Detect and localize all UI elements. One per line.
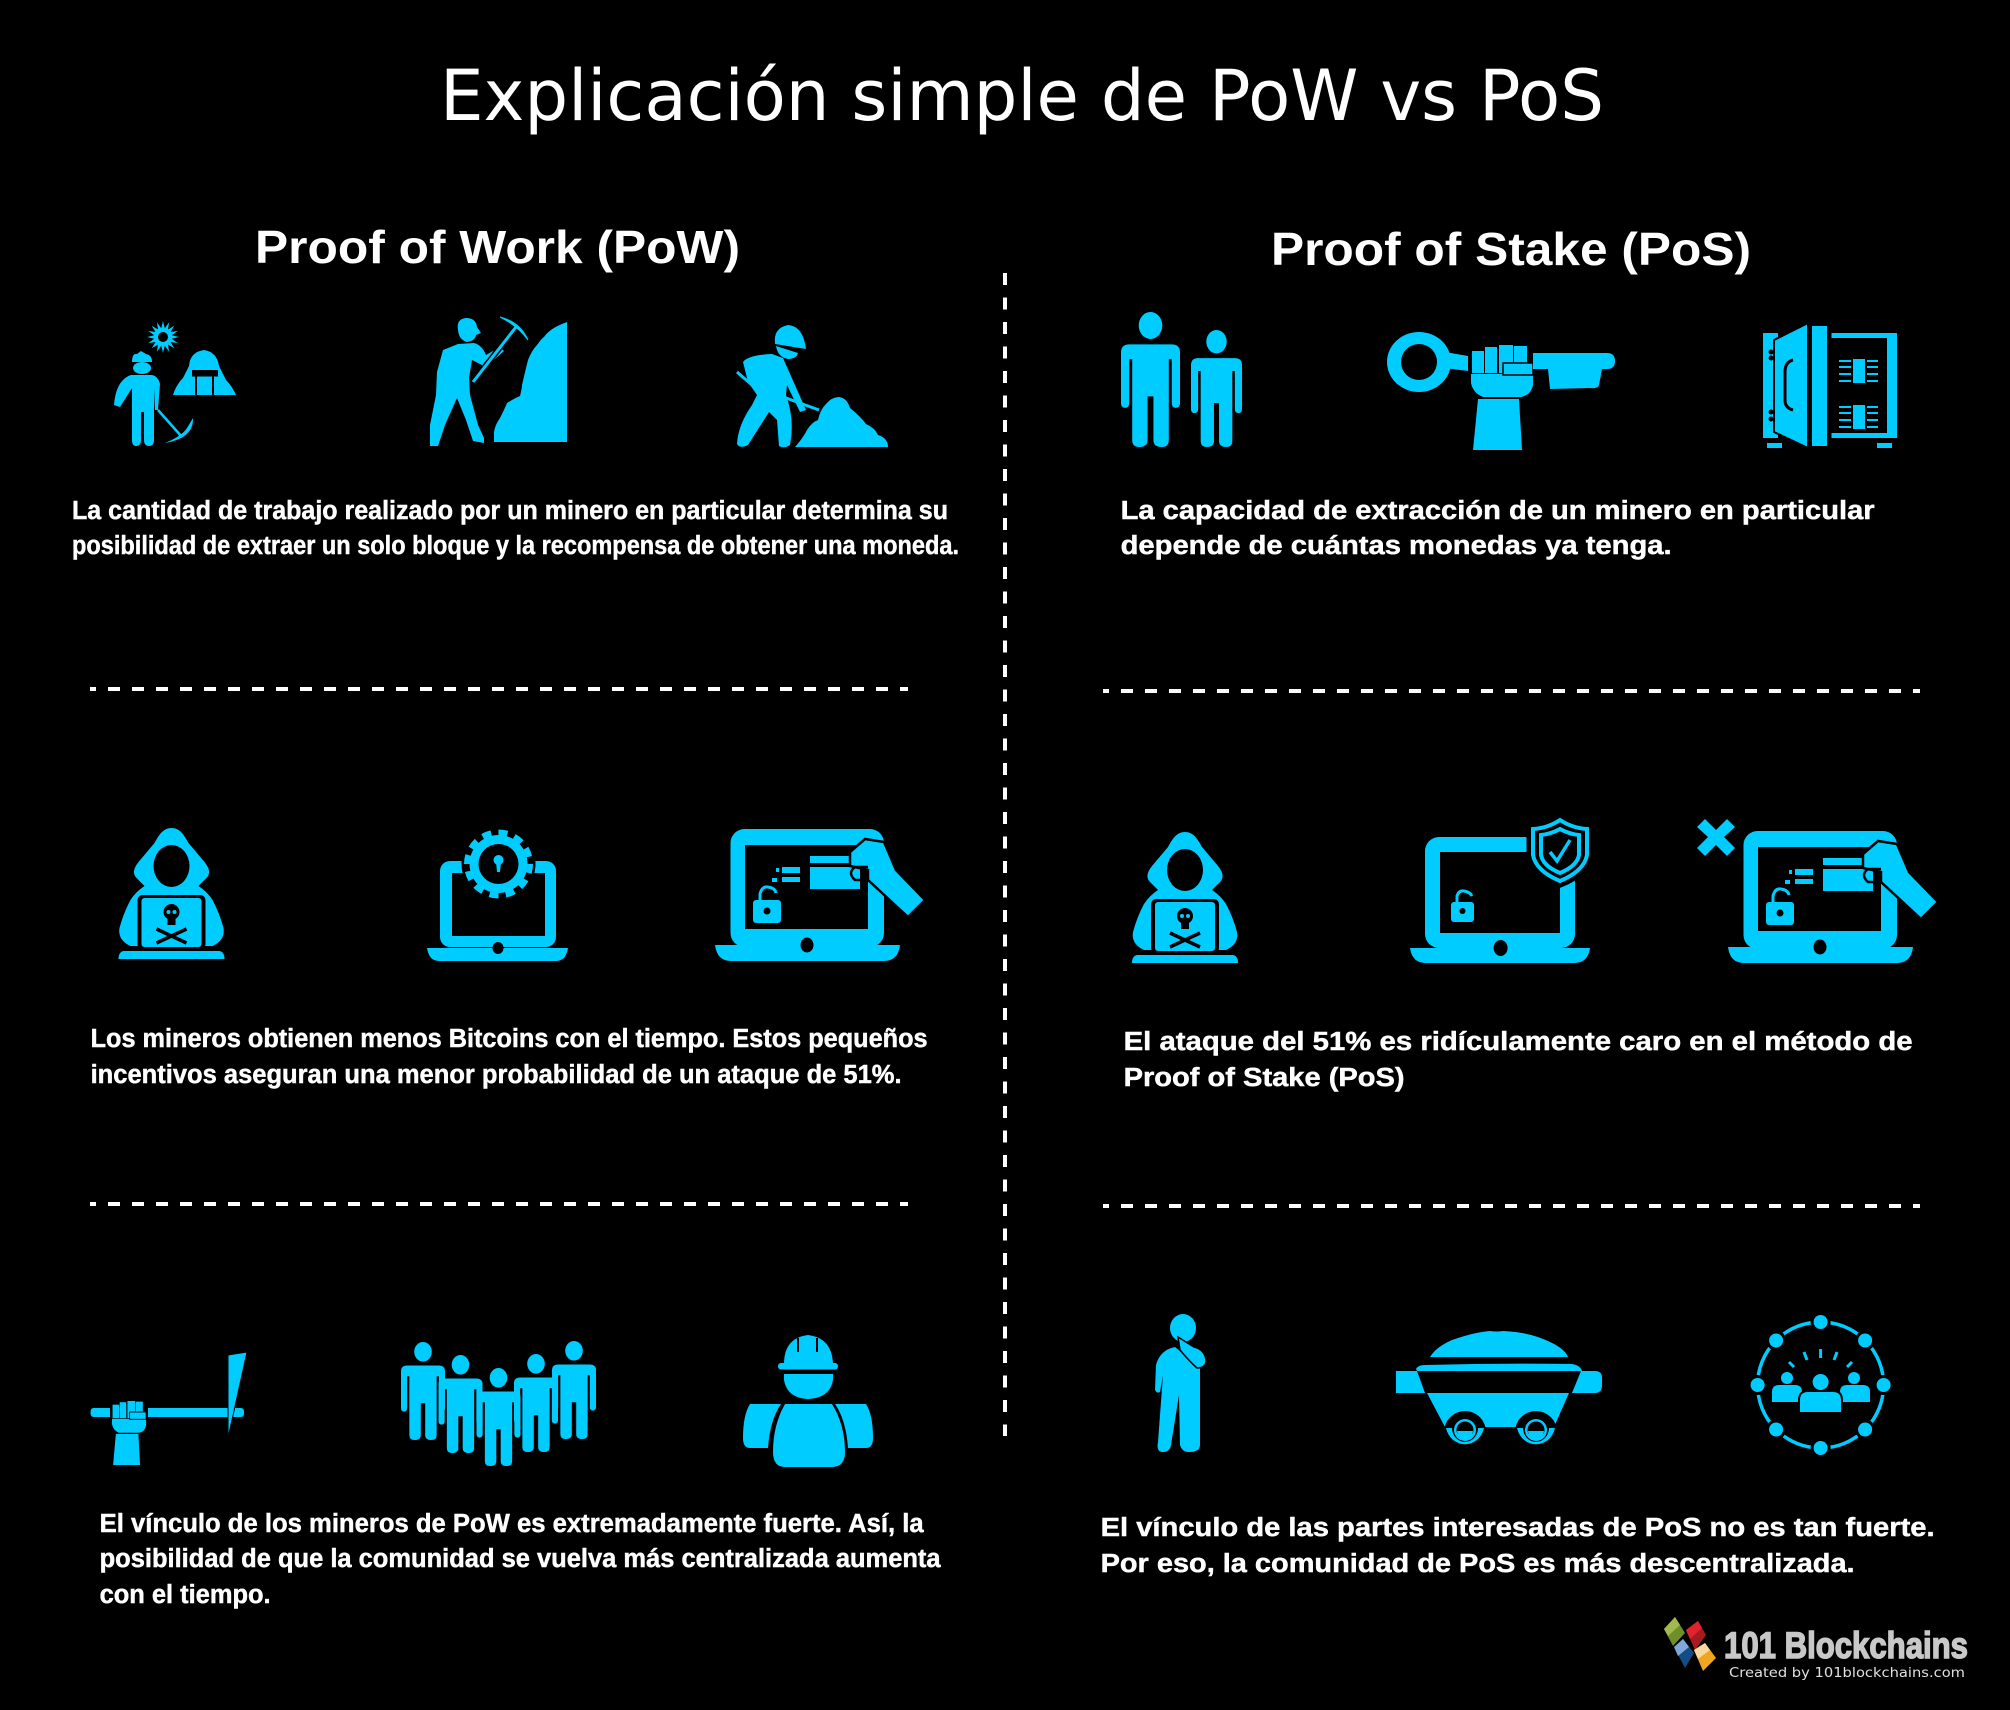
heading: Proof of Work: Proof of Work (PoW) <box>255 221 740 273</box>
icon: open safe <box>1763 323 1897 448</box>
icon: laptop with card PoS <box>1728 831 1938 963</box>
text: PoS stake <box>1121 497 1875 560</box>
icon: laptop with card in hand <box>715 829 925 961</box>
icon: fist with hammer <box>91 1352 247 1465</box>
icon: laptop with gear keyhole <box>427 827 568 961</box>
text: PoS stake: depende de cuántas monedas ya tenga. <box>1121 532 1672 560</box>
text: PoS stake: La capacidad de extracción de un minero en particular <box>1121 497 1875 525</box>
text: PoW work <box>72 497 959 560</box>
text: PoS bond: Por eso, la comunidad de PoS es más descentralizada. <box>1101 1550 1855 1578</box>
text: PoW work: La cantidad de trabajo realizado por un minero en particular determina su <box>72 497 948 525</box>
icon: hacker PoS <box>1132 832 1238 963</box>
text: PoW attack: incentivos aseguran una menor probabilidad de un ataque de 51%. <box>91 1061 902 1089</box>
text: PoS bond <box>1101 1514 1935 1578</box>
icon: community network <box>1749 1314 1892 1456</box>
text: PoW bond: El vínculo de los mineros de PoW es extremadamente fuerte. Así, la <box>100 1510 924 1538</box>
panel: PoW row 2 <box>91 827 928 1089</box>
panel: PoS row 3 <box>1101 1314 1935 1578</box>
panel: PoW row 3 <box>91 1335 941 1609</box>
text: PoW bond <box>100 1510 941 1609</box>
icon: laptop with shield <box>1410 818 1590 963</box>
text: PoW bond: con el tiempo. <box>100 1581 271 1609</box>
text: PoS attack <box>1124 1028 1913 1092</box>
text: PoW attack: Los mineros obtienen menos Bitcoins con el tiempo. Estos pequeños <box>91 1025 928 1053</box>
icon: cross mark <box>1697 819 1735 856</box>
logo: 101 Blockchains: Created by 101blockchains.com <box>1729 1665 1965 1681</box>
icon: two people <box>1121 312 1242 447</box>
icon: fist holding key <box>1387 332 1615 450</box>
icon: hacker <box>118 828 224 959</box>
icon: thinking person <box>1155 1314 1206 1452</box>
logo: 101 Blockchains <box>1664 1617 1968 1681</box>
title: Explicación simple de PoW vs PoS <box>440 55 1604 137</box>
text: PoS attack: Proof of Stake (PoS) <box>1124 1064 1405 1092</box>
icon: mine cart <box>1396 1331 1602 1453</box>
icon: worker shoveling a pile <box>737 325 888 447</box>
panel: PoW row 1 <box>72 317 959 560</box>
heading: Proof of Stake: Proof of Stake (PoS) <box>1271 223 1751 275</box>
icon: miner swinging pickaxe at rock <box>430 317 567 446</box>
icon: worker with helmet <box>743 1335 873 1467</box>
text: PoW attack <box>91 1025 928 1089</box>
text: PoW work: posibilidad de extraer un solo bloque y la recompensa de obtener una moneda. <box>72 532 959 560</box>
icon: group of miners <box>401 1341 596 1466</box>
icon: miner with mine and sun <box>114 321 236 446</box>
icon: coloured cubes <box>1664 1617 1716 1671</box>
text: PoS bond: El vínculo de las partes interesadas de PoS no es tan fuerte. <box>1101 1514 1935 1542</box>
panel: PoS row 2 <box>1124 818 1938 1092</box>
text: PoW bond: posibilidad de que la comunidad se vuelva más centralizada aumenta <box>100 1545 941 1573</box>
text: PoS attack: El ataque del 51% es ridículamente caro en el método de <box>1124 1028 1913 1056</box>
logo: 101 Blockchains: 101 Blockchains <box>1724 1625 1968 1666</box>
panel: PoS row 1 <box>1121 312 1897 560</box>
